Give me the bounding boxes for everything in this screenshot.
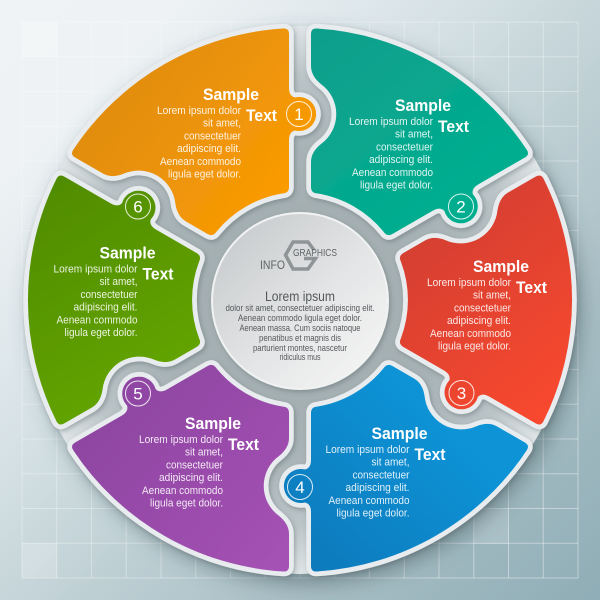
text: segment 1: Aenean commodo xyxy=(160,156,241,168)
text: segment 2: Text xyxy=(438,117,469,136)
text: segment 1: ligula eget dolor. xyxy=(168,168,241,180)
text: segment 3: adipiscing elit. xyxy=(447,315,511,327)
text: segment 2: adipiscing elit. xyxy=(369,154,433,166)
center text: parturient montes, nascetur xyxy=(253,343,347,353)
text: segment 3: sit amet, xyxy=(473,290,511,302)
text: segment 5: consectetuer xyxy=(166,459,223,471)
text: segment 2 xyxy=(349,96,469,192)
text: segment 5: sit amet, xyxy=(185,447,223,459)
text: segment 3: Lorem ipsum dolor xyxy=(427,277,511,289)
text: segment 2: ligula eget dolor. xyxy=(360,180,433,192)
text: segment 5 xyxy=(139,414,259,510)
badge: 4: 4 xyxy=(295,478,305,497)
segment: green xyxy=(28,175,200,425)
badge: 6 xyxy=(126,194,150,219)
segment: teal xyxy=(311,28,528,235)
text: segment 1: Lorem ipsum dolor xyxy=(157,105,241,117)
center text: dolor sit amet, consectetuer adipiscing elit. xyxy=(226,303,374,313)
text: segment 4: Text xyxy=(414,445,446,464)
text: segment 6: ligula eget dolor. xyxy=(64,327,138,339)
badge: 5 xyxy=(126,381,150,406)
text: segment 3: Aenean commodo xyxy=(430,328,511,340)
logo: info graphics: INFO xyxy=(260,260,285,272)
text: segment 4: adipiscing elit. xyxy=(346,482,410,494)
segment: orange xyxy=(72,28,316,235)
text: segment 3 xyxy=(427,257,547,352)
text: segment 5: adipiscing elit. xyxy=(159,472,223,484)
badge: 5: 5 xyxy=(133,384,143,404)
text: segment 6: Text xyxy=(142,264,174,284)
text: segment 6: consectetuer xyxy=(80,289,138,301)
text: segment 6: adipiscing elit. xyxy=(74,302,138,314)
text: segment 6: Sample xyxy=(100,244,156,262)
text: segment 3: consectetuer xyxy=(454,302,511,314)
text: segment 1: Text xyxy=(246,106,277,125)
badge: 1 xyxy=(286,102,312,126)
text: segment 2: Lorem ipsum dolor xyxy=(349,116,433,128)
center text: penatibus et magnis dis xyxy=(259,333,341,343)
text: segment 2: sit amet, xyxy=(395,129,433,141)
text: segment 5: Aenean commodo xyxy=(142,485,223,497)
text: segment 3: ligula eget dolor. xyxy=(438,340,511,352)
text: segment 1 xyxy=(157,85,277,180)
text: segment 1: consectetuer xyxy=(184,130,241,142)
text: segment 5: Sample xyxy=(185,414,241,433)
center text: Aenean massa. Cum sociis natoque xyxy=(240,323,360,333)
text: segment 3: Sample xyxy=(473,257,529,276)
badge: 2 xyxy=(448,194,474,219)
segment: red xyxy=(400,175,572,425)
text: segment 6: sit amet, xyxy=(100,276,138,288)
text: segment 6: Lorem ipsum dolor xyxy=(54,264,138,276)
text: segment 5: Text xyxy=(228,435,259,454)
text: segment 3: Text xyxy=(516,278,547,297)
text: segment 6 xyxy=(54,244,174,339)
text: segment 4 xyxy=(326,424,446,520)
badge: 2: 2 xyxy=(456,198,466,216)
center circle xyxy=(212,213,388,389)
segment: blue xyxy=(284,365,528,572)
text: segment 6: Aenean commodo xyxy=(56,314,138,326)
text: segment 2: consectetuer xyxy=(376,141,433,153)
text: segment 4: Sample xyxy=(372,424,428,443)
badge: 6: 6 xyxy=(133,198,143,216)
text: segment 1: sit amet, xyxy=(203,118,241,130)
text: segment 1: Sample xyxy=(203,85,259,104)
center text: Aenean commodo ligula eget dolor. xyxy=(238,313,362,323)
badge: 4 xyxy=(288,474,312,500)
logo: info graphics: GRAPHICS xyxy=(293,247,337,259)
center text xyxy=(226,289,374,362)
text: segment 4: ligula eget dolor. xyxy=(336,508,410,520)
text: segment 2: Aenean commodo xyxy=(352,167,433,179)
text: segment 4: Lorem ipsum dolor xyxy=(326,444,410,456)
center text: Lorem ipsum xyxy=(265,289,335,304)
text: segment 4: sit amet, xyxy=(372,457,410,469)
grid tint cells xyxy=(22,22,509,578)
text: segment 1: adipiscing elit. xyxy=(177,143,241,155)
text: segment 5: Lorem ipsum dolor xyxy=(139,434,223,446)
center text: ridiculus mus xyxy=(280,352,321,362)
badge: 3 xyxy=(449,380,474,406)
logo: info graphics xyxy=(260,242,337,272)
text: segment 4: consectetuer xyxy=(352,469,410,481)
text: segment 2: Sample xyxy=(395,96,451,115)
text: segment 4: Aenean commodo xyxy=(328,495,410,507)
text: segment 5: ligula eget dolor. xyxy=(150,498,223,510)
badge: 3: 3 xyxy=(457,384,466,403)
badge: 1: 1 xyxy=(294,105,304,124)
segment: purple xyxy=(72,365,289,572)
